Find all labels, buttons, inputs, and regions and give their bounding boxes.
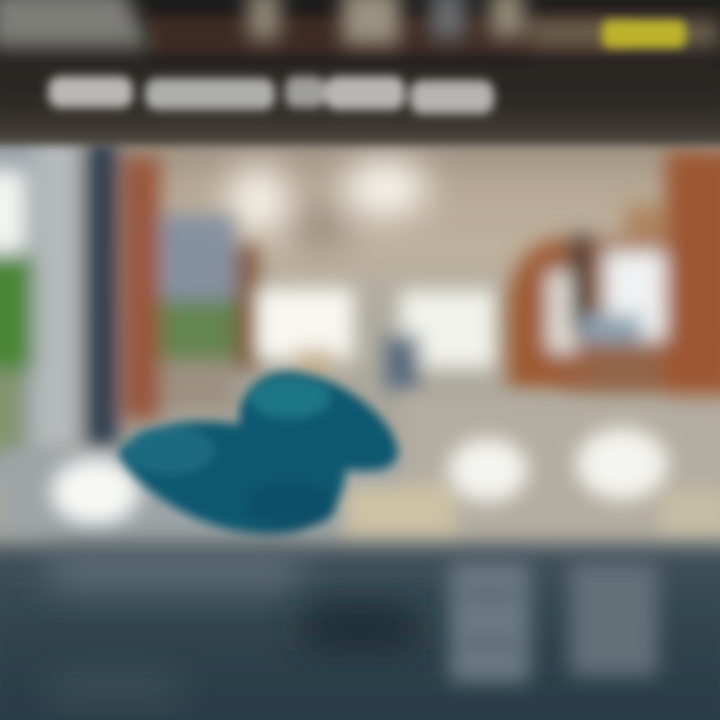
blurred white banner — [48, 76, 494, 114]
left wall: window, foliage and columns — [0, 100, 258, 480]
bottom shadow block — [305, 605, 415, 650]
bottom text block: centre — [450, 562, 530, 682]
bottom left text blur — [50, 552, 300, 698]
floor reflections — [51, 428, 668, 526]
yellow sign — [602, 20, 686, 48]
ceiling — [130, 130, 690, 390]
top ceiling band — [0, 0, 720, 145]
ceiling beams — [0, 0, 720, 48]
floor — [0, 395, 720, 540]
bottom text block: right — [570, 562, 658, 676]
right wall: arch, window and column — [508, 150, 720, 430]
teal sofa — [118, 372, 398, 535]
ceiling lights — [228, 160, 427, 250]
bottom dark panel — [0, 545, 720, 720]
centre windows — [256, 288, 496, 390]
